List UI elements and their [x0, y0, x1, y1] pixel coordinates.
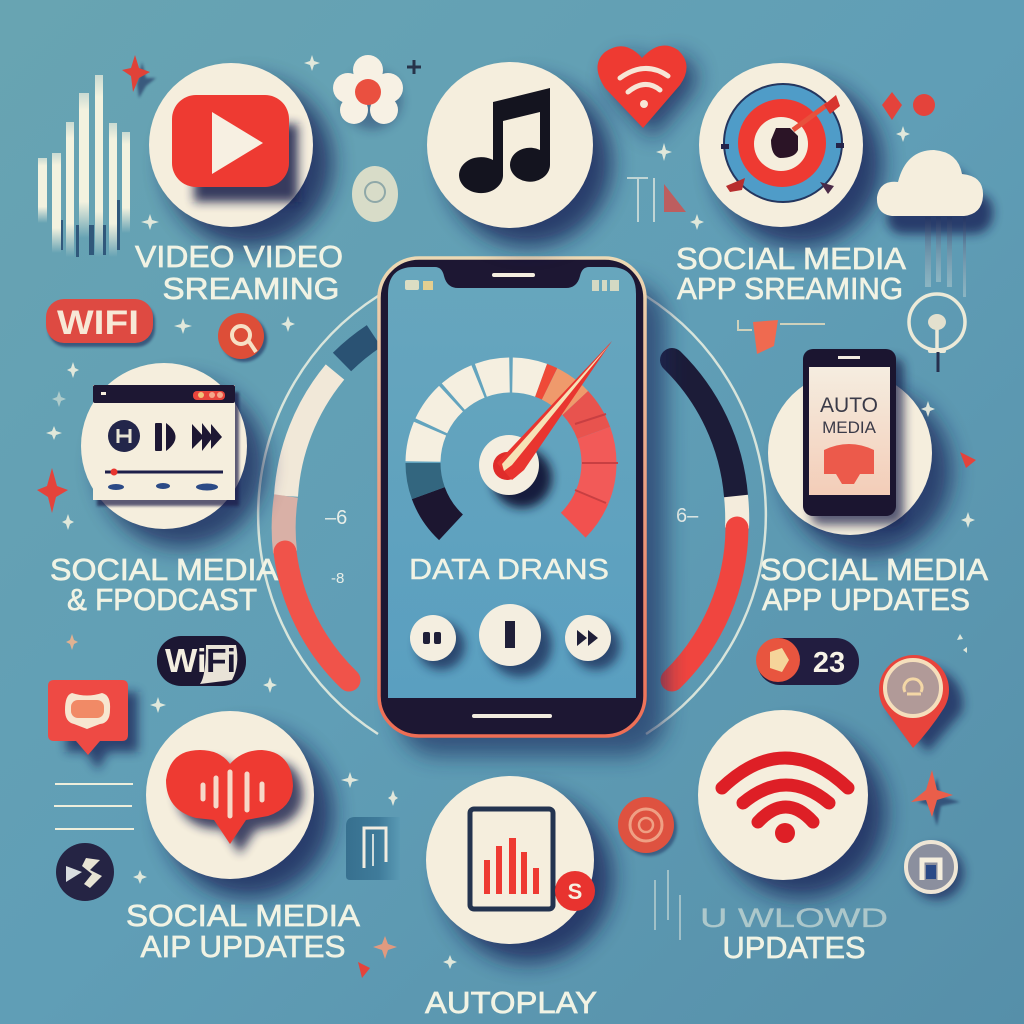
icon: video play circle [149, 63, 333, 247]
icon: pin ring [909, 294, 965, 372]
phone shadow [398, 282, 666, 756]
badge: wifi red [46, 299, 155, 347]
label: autoplay: AUTOPLAY [425, 985, 597, 1020]
label: social media aip updates: AIP UPDATES [140, 929, 346, 964]
icon: music note circle [427, 62, 612, 247]
badge: counter 23: 23 [813, 647, 845, 679]
label: video streaming [135, 239, 343, 306]
label: social media aip updates: SOCIAL MEDIA [126, 898, 360, 933]
decorative marks [37, 92, 976, 978]
icon: round app token [906, 842, 964, 900]
phone [379, 258, 666, 756]
icon: audio bars [38, 75, 130, 257]
media buttons [410, 604, 620, 677]
icon: bar chart circle: S [568, 879, 582, 904]
gauge tick labels: -8 [331, 570, 344, 587]
badge: wifi dark: Fi [206, 642, 236, 679]
label: social media podcast: SOCIAL MEDIA [50, 552, 278, 587]
gauge dial hub [479, 435, 539, 495]
left gauge arc [284, 336, 374, 680]
icon: small location token [218, 313, 267, 362]
icon: red sparkle [122, 55, 156, 98]
badge: wifi dark [157, 636, 246, 686]
dark plus mark [407, 60, 421, 74]
right gauge arc [672, 360, 737, 680]
faded lines by bar chart [655, 870, 680, 940]
label: video streaming: SREAMING [162, 271, 340, 306]
icon: target circle [699, 63, 883, 247]
icon: dark bird badge [56, 843, 114, 901]
gauge hub shadow [492, 448, 552, 508]
gauge tick labels [325, 505, 699, 587]
icon: speech heart [48, 680, 138, 770]
badge: wifi dark: WiFi [165, 642, 237, 679]
icon: phone auto media circle: MEDIA [822, 418, 877, 437]
icon: phone auto media circle: AUTO [820, 394, 878, 417]
icon: small square glyph [346, 817, 400, 880]
icon: pale T marks [627, 178, 654, 222]
gauge tick labels: 6– [676, 505, 699, 527]
icon: voice heart circle [146, 711, 333, 898]
screen label: DATA DRANS [409, 554, 609, 586]
icon: phone auto media circle [768, 349, 952, 555]
phone body [379, 258, 645, 736]
icon: map pin [879, 655, 963, 752]
gauge needle [497, 341, 612, 480]
large ring behind phone [258, 296, 766, 734]
label: social media podcast [50, 552, 278, 617]
status icons [405, 280, 619, 291]
label: video streaming: VIDEO VIDEO [135, 239, 343, 274]
icon: spiral token [618, 797, 677, 856]
icon: star right [911, 770, 960, 826]
gauge tick labels: –6 [325, 507, 347, 529]
icon: clock token [352, 166, 398, 222]
label: social media aip updates [126, 898, 360, 964]
label: social media app updates [760, 552, 988, 617]
badge: wifi red: WIFI [57, 304, 139, 342]
label: social media app streaming: SOCIAL MEDIA [676, 241, 906, 276]
label: download updates: U WLOWD [700, 903, 888, 933]
icon: heart with wifi [598, 46, 697, 138]
home indicator [472, 714, 552, 718]
icon: bar chart circle [426, 776, 613, 963]
badge: counter 23 [756, 638, 859, 685]
label: social media app updates: APP UPDATES [762, 582, 970, 617]
notch speaker [492, 273, 535, 277]
speech lines [54, 784, 134, 829]
central speedometer [423, 341, 618, 527]
label: social media podcast: & FPODCAST [67, 582, 257, 617]
icon: cloud [877, 150, 993, 297]
label: social media app streaming [676, 241, 906, 306]
label: social media app streaming: APP SREAMING [677, 271, 903, 306]
accent lines beside flag [738, 320, 825, 330]
media player window [93, 385, 239, 506]
label: download updates [700, 903, 888, 965]
label: download updates: UPDATES [722, 930, 866, 965]
icon: wifi circle [698, 710, 886, 898]
label: social media app updates: SOCIAL MEDIA [760, 552, 988, 587]
phone screen [388, 267, 636, 698]
icon: media player circle [81, 363, 266, 548]
icon: flower [333, 55, 403, 130]
